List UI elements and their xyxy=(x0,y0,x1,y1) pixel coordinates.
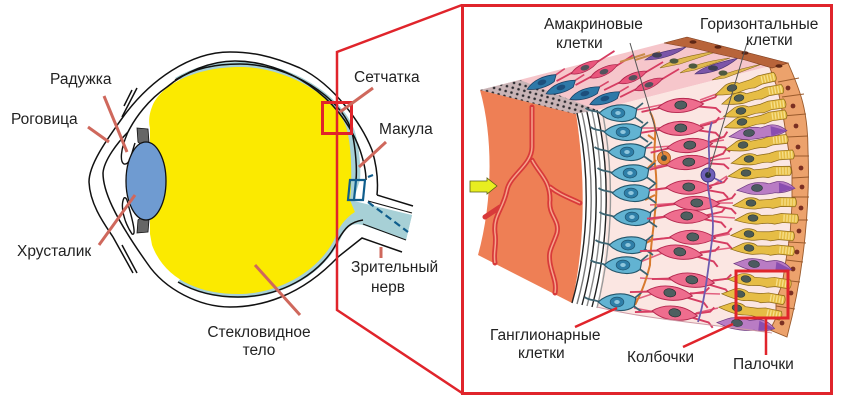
bottom edge line xyxy=(597,307,772,333)
eye outlines xyxy=(89,52,413,307)
frame: red zoom connector xyxy=(322,5,832,394)
label: Ганглионарные клетки: Ганглионарные xyxy=(490,327,600,344)
label: Зрительный нерв: Зрительный xyxy=(351,259,438,276)
callout: rods highlight box xyxy=(736,271,788,318)
retinal pigment epithelium xyxy=(770,63,809,337)
sclera and cornea fill xyxy=(89,52,413,307)
bipolar cells xyxy=(629,92,737,328)
label: Амакриновые клетки: Амакриновые xyxy=(544,16,643,33)
ciliary body xyxy=(137,128,149,233)
dotted top edge xyxy=(480,80,597,114)
leader lines: eye labels xyxy=(88,88,386,315)
icon: yellow light arrow xyxy=(470,178,497,194)
top surface of tissue xyxy=(480,37,788,113)
macula marker xyxy=(348,180,365,200)
top surface cells xyxy=(525,47,762,107)
label: Макула: Макула xyxy=(379,121,433,138)
top pigment band xyxy=(664,37,788,68)
cones xyxy=(716,124,795,334)
amacrine cell xyxy=(658,152,670,164)
blood vessels xyxy=(485,107,580,293)
label: Стекловидное тело: тело xyxy=(243,342,275,359)
label: Амакриновые клетки: клетки xyxy=(556,35,603,52)
label: Палочки: Палочки xyxy=(733,356,794,373)
rods xyxy=(713,72,799,323)
iris xyxy=(121,132,135,234)
label: Ганглионарные клетки: клетки xyxy=(518,345,565,362)
connecting processes xyxy=(634,92,735,313)
optic nerve dashed line xyxy=(368,175,408,232)
label: Зрительный нерв: нерв xyxy=(371,279,405,296)
panel: retina close-up xyxy=(470,37,809,337)
retina band xyxy=(175,62,412,298)
ganglion cells xyxy=(584,103,657,312)
panel: eye cross-section xyxy=(89,52,413,307)
label: Горизонтальные клетки: клетки xyxy=(746,32,793,49)
nerve fibre layer xyxy=(572,110,610,308)
leader lines: retina labels xyxy=(575,43,766,355)
vitreous body xyxy=(149,67,355,294)
lens xyxy=(126,142,166,220)
optic nerve xyxy=(338,200,412,240)
label: Горизонтальные клетки: Горизонтальные xyxy=(700,16,818,33)
front face background xyxy=(597,66,801,332)
horizontal cell xyxy=(698,122,722,322)
label: Сетчатка: Сетчатка xyxy=(354,69,420,86)
choroid layer xyxy=(478,90,583,303)
label: Хрусталик: Хрусталик xyxy=(17,243,91,260)
label: Радужка: Радужка xyxy=(50,71,112,88)
amacrine processes xyxy=(635,112,656,305)
label: Роговица: Роговица xyxy=(11,111,78,128)
label: Колбочки: Колбочки xyxy=(627,349,694,366)
label: Стекловидное тело: Стекловидное xyxy=(207,324,311,341)
